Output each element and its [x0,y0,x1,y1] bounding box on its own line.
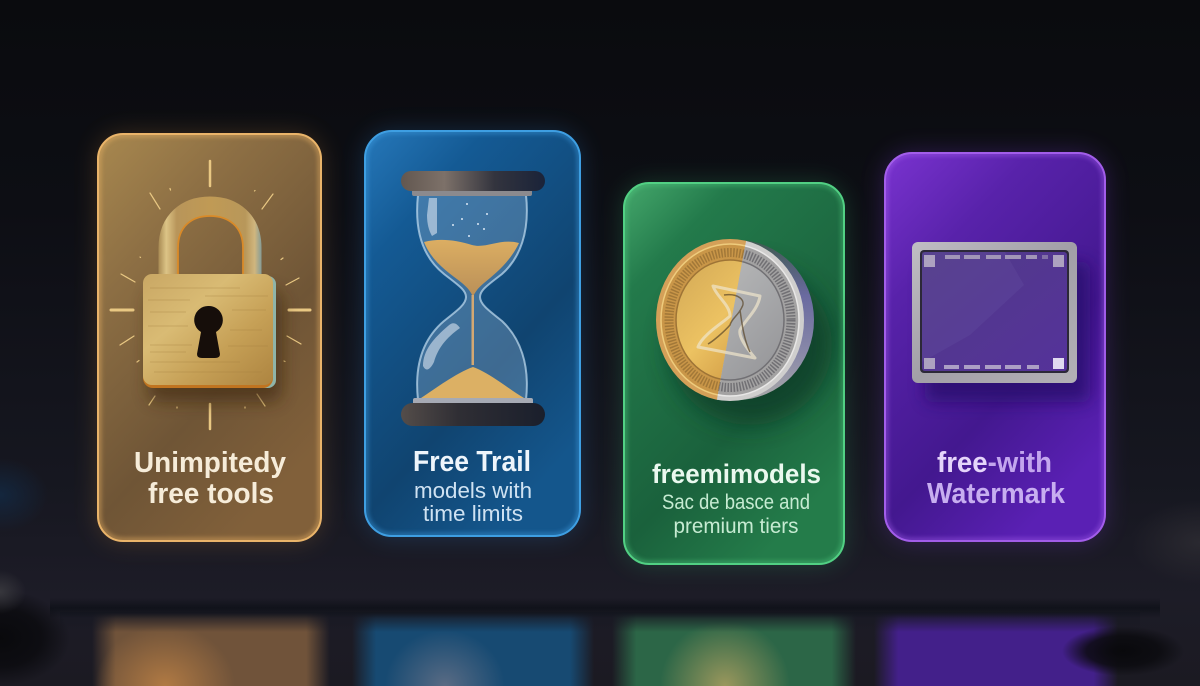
label [134,447,286,510]
card glow [364,130,581,537]
outer frame [912,242,1077,383]
panel: gold card [97,133,322,542]
label: free tools [148,478,274,510]
rock: bottom right [1062,626,1184,676]
floor fade [60,612,1140,632]
card glow [97,133,322,542]
icon: coin [656,239,832,425]
reflection: purple [874,612,1118,686]
card body [98,134,321,541]
shackle [168,206,252,276]
inner edge glow [625,184,843,563]
label: Unimpitedy [134,447,286,479]
rock: upper right [1130,500,1200,585]
highlight: green [660,620,790,686]
top dashes [945,255,1048,259]
bottom sand pile [421,367,524,400]
floor edge [50,598,1160,618]
glass highlights [423,198,460,369]
label: free-with [937,447,1052,479]
keyhole [194,306,223,358]
label: Sac de basce and [662,491,810,514]
top cap [412,188,532,196]
card body [885,153,1105,541]
embossed hourglass [698,286,760,358]
corner marks [924,255,1064,369]
icon: watermarked video frame [912,242,1090,402]
icon: padlock [143,206,282,402]
lock shadow [148,290,282,402]
lock bottom edge [143,300,273,388]
top cap rim [401,171,545,191]
base rim [401,403,545,426]
lock side [240,276,276,388]
card body [365,131,580,536]
panel: purple card [884,152,1106,542]
icon: hourglass [401,171,545,426]
highlight: gold [95,625,235,686]
shackle inner edge [178,216,243,276]
label: time limits [423,501,523,526]
base plate [413,398,533,406]
label: premium tiers [674,515,798,538]
top sand [424,240,519,297]
label [927,447,1066,510]
lock body [143,274,273,385]
rock: bottom left [0,590,70,686]
label: freemimodels [652,459,821,489]
card glow [884,152,1106,542]
panel: blue card [364,130,581,537]
brushed texture [148,288,268,372]
silver half [716,241,804,401]
rock: left blue [0,458,48,532]
icon: glow rays [111,161,310,429]
inner edge glow [366,132,579,535]
label [652,459,821,538]
card body [624,183,844,564]
falling sand stream [472,295,474,365]
highlight: blue [385,630,505,686]
card glow [623,182,845,565]
coin edge [660,240,814,400]
panel: green card [623,182,845,565]
bottom dashes [944,365,1039,369]
gold half [656,239,747,400]
reflection: green [612,612,856,686]
inner edge glow [886,154,1104,540]
coin shadow [668,265,832,425]
floor reflections [60,612,1140,686]
frame shadow [925,262,1090,402]
faint play shape [922,252,1024,362]
label: models with [414,478,532,503]
reflection: blue [352,612,594,686]
reflection: gold [92,612,330,686]
glass [417,195,527,400]
hourglass inner line [708,295,750,352]
label: Free Trail [413,446,531,478]
inner dark edge [920,250,1069,373]
airborne grains [452,203,488,237]
label [413,446,532,526]
rock: bottom left highlight [0,570,26,614]
inner edge glow [99,135,320,540]
label: Watermark [927,478,1066,510]
screen [922,252,1067,371]
